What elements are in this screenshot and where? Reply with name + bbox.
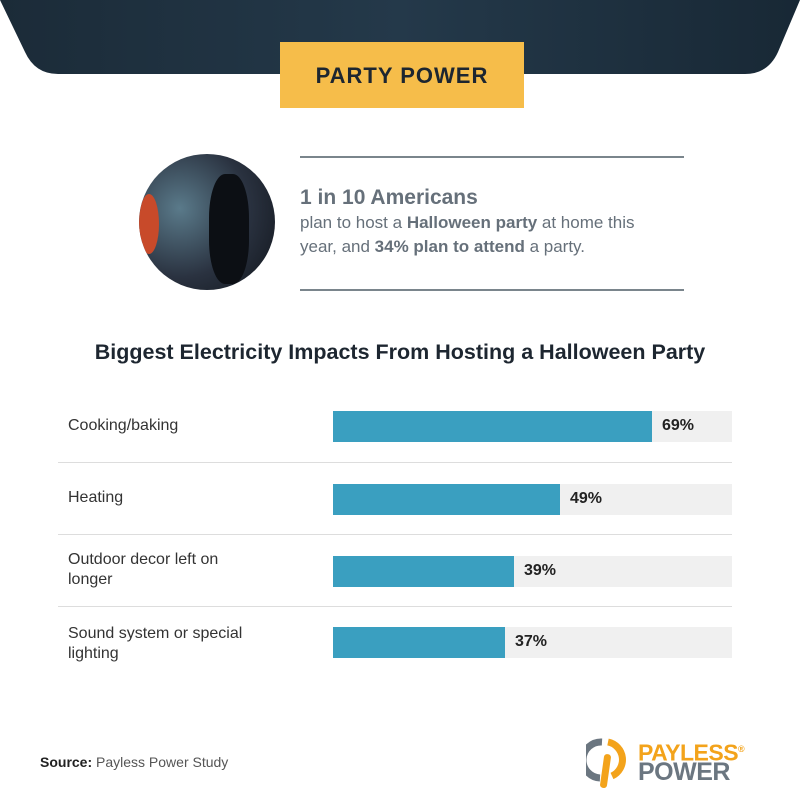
bar chart: Sound system or special lighting [68,625,242,662]
title badge [280,42,524,108]
bar chart: Heating [68,489,123,506]
bar chart: 69% [662,417,694,434]
header banner [0,0,800,74]
logo: POWER [638,758,730,786]
bar chart: 39% [524,562,556,579]
chart title: Biggest Electricity Impacts From Hosting a Halloween Party [95,340,705,364]
stat text: plan to host a Halloween party at home this [300,213,635,232]
bar chart [58,411,732,662]
bar chart: Outdoor decor left on longer [68,551,218,588]
stat text: 1 in 10 Americans [300,186,478,209]
bar chart: 49% [570,490,602,507]
stat text [300,186,635,256]
source: Source: Payless Power Study [40,754,228,770]
logo [586,738,744,788]
photo circle [139,154,275,290]
bar chart: Cooking/baking [68,417,178,434]
bar chart: 37% [515,633,547,650]
logo: PAYLESS® [638,740,744,766]
divider line top [300,156,684,158]
stat text: year, and 34% plan to attend a party. [300,237,585,256]
title badge: PARTY POWER [316,63,488,88]
